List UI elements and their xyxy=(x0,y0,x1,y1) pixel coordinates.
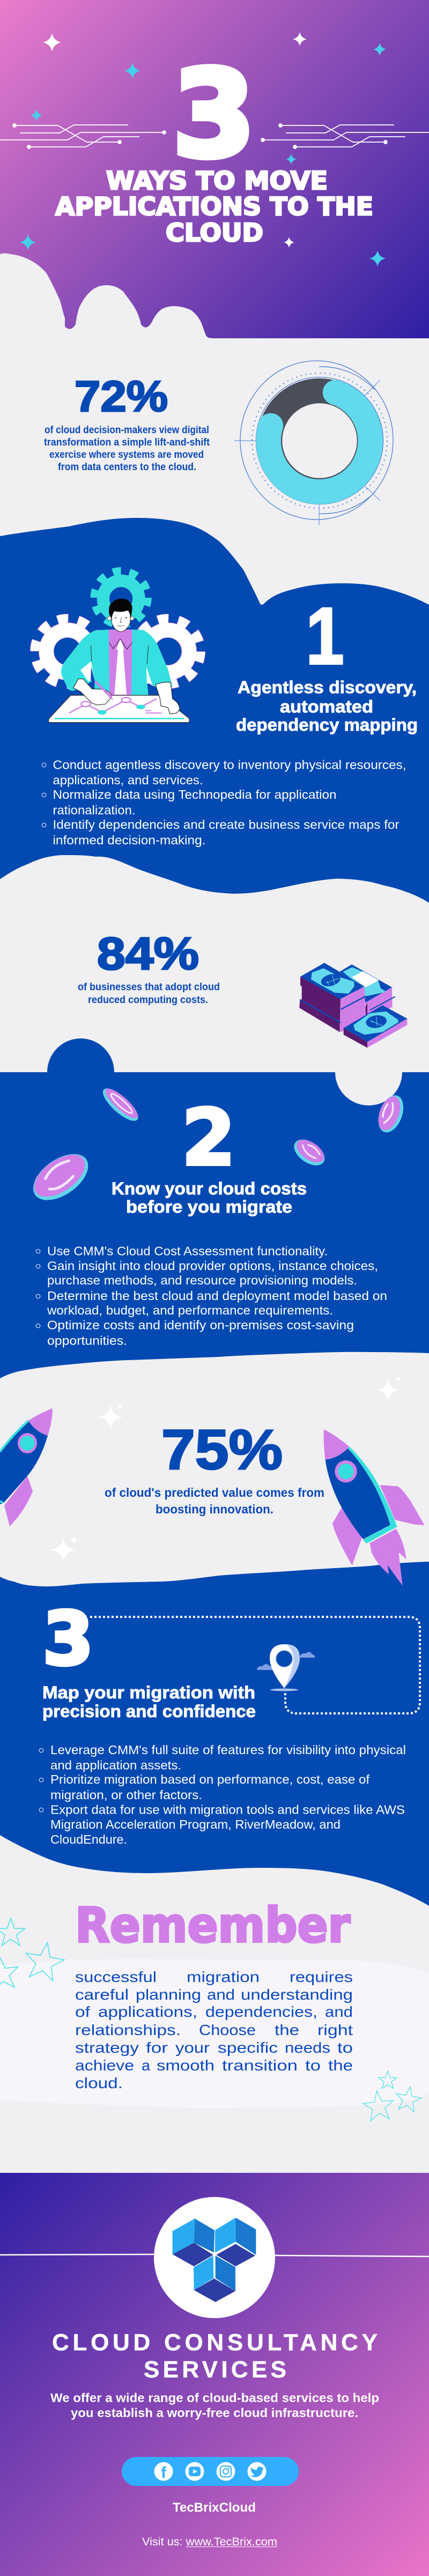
remember body text: applications, xyxy=(98,2003,197,2020)
icon: stars right xyxy=(361,2071,423,2121)
remember body text: the xyxy=(275,2022,299,2038)
title: CLOUD xyxy=(166,218,263,247)
logo circle xyxy=(154,2197,275,2318)
title: APPLICATIONS TO THE xyxy=(55,192,373,221)
step 3 bullets: migration, or other factors. xyxy=(50,1788,202,1802)
sparkle cyan xyxy=(369,250,386,266)
title xyxy=(55,166,373,247)
jacket xyxy=(61,629,173,695)
stat description: of cloud decision-makers view digital xyxy=(45,425,209,436)
step 3 bullets xyxy=(39,1743,406,1846)
remember body text: successful xyxy=(75,1969,157,1985)
remember body text: careful xyxy=(75,1986,129,2003)
title: WAYS TO MOVE xyxy=(106,166,328,195)
stat number: 75% xyxy=(161,1419,283,1481)
panel: stat 84% xyxy=(78,929,407,1048)
remember body text: achieve xyxy=(75,2057,134,2074)
step 3 bullets: Prioritize migration based on performance, cost, ease of xyxy=(50,1772,370,1786)
icon: coin right xyxy=(374,1092,408,1136)
step 1 bullets: Normalize data using Technopedia for application xyxy=(53,788,337,801)
remember body text: of xyxy=(75,2003,90,2020)
left hand with pen xyxy=(73,679,113,705)
stat description xyxy=(78,982,220,1006)
stat description: transformation a simple lift-and-shift xyxy=(44,437,210,448)
icon: twitter xyxy=(248,2462,266,2481)
stat description: boosting innovation. xyxy=(156,1502,273,1516)
panel: footer xyxy=(0,2173,429,2576)
panel: stat 75% band xyxy=(0,1352,429,1586)
circuit lines right xyxy=(261,124,429,149)
remember body text xyxy=(75,1969,353,2091)
remember body text: a xyxy=(142,2057,150,2074)
remember body text: and xyxy=(207,1986,235,2003)
panel: remember background xyxy=(0,1835,429,2173)
icon: stacks of money xyxy=(299,963,407,1048)
step 2 bullets: Gain insight into cloud provider options, instance choices, xyxy=(47,1259,378,1273)
remember body text: dependencies, xyxy=(205,2003,317,2020)
remember body text: cloud. xyxy=(75,2075,123,2091)
donut chart xyxy=(234,361,393,525)
remember body text: the xyxy=(328,2057,353,2074)
step 3 bullets: and application assets. xyxy=(50,1758,181,1772)
step 1 heading: Agentless discovery, xyxy=(238,678,417,697)
remember body text: and xyxy=(325,2003,353,2020)
remember body text: specific xyxy=(218,2039,278,2056)
step 2 bullets: purchase methods, and resource provisioning models. xyxy=(47,1273,357,1287)
sparkle white xyxy=(43,33,61,51)
step 2 heading xyxy=(112,1179,307,1216)
step 1 number: 1 xyxy=(306,591,344,681)
step 1 heading xyxy=(236,678,418,734)
icon: facebook: f xyxy=(161,2464,167,2482)
remember body text: for xyxy=(146,2039,168,2056)
remember heading: Remember xyxy=(75,1897,350,1953)
step 1 bullets: Conduct agentless discovery to inventory physical resources, xyxy=(53,758,406,772)
footer description xyxy=(50,2391,379,2420)
icon: coin small xyxy=(290,1134,329,1171)
sparkle group xyxy=(50,1376,402,1563)
front stack xyxy=(344,1005,407,1048)
sparkle cyan xyxy=(20,234,36,250)
fins and flame xyxy=(332,1485,425,1586)
footer description: you establish a worry-free cloud infrastructure. xyxy=(71,2406,358,2420)
circuit lines left xyxy=(0,124,166,149)
window xyxy=(335,1460,357,1482)
panel: step 1 blue background xyxy=(0,518,429,903)
sparkle cyan xyxy=(373,43,386,56)
collar lines xyxy=(91,639,149,664)
stat description xyxy=(105,1486,324,1516)
step 3 heading: precision and confidence xyxy=(42,1702,256,1721)
step 3 heading: Map your migration with xyxy=(42,1683,255,1702)
step 1 bullets: Identify dependencies and create business service maps for xyxy=(53,818,400,832)
gear white left xyxy=(35,619,100,684)
remember body text: relationships. xyxy=(75,2022,181,2038)
body trim xyxy=(347,1446,397,1543)
step 1 bullets: applications, and services. xyxy=(53,773,203,787)
big number 3: 3 xyxy=(173,46,255,184)
footer description: We offer a wide range of cloud-based services to help xyxy=(50,2391,379,2405)
remember body text: Choose xyxy=(199,2022,256,2038)
notch in blue panel xyxy=(335,1072,402,1105)
panel: hero header xyxy=(0,0,429,343)
stat description: of businesses that adopt cloud xyxy=(78,982,220,993)
panel: step 2 blue background xyxy=(0,1038,429,1909)
step 1 bullets: rationalization. xyxy=(53,803,135,817)
sparkle cyan xyxy=(124,63,140,79)
step 3 number: 3 xyxy=(43,1597,93,1682)
remember body text: planning xyxy=(136,1986,201,2003)
shirt xyxy=(109,629,132,695)
website link: Visit us: www.TecBrix.com xyxy=(142,2536,277,2548)
footer title xyxy=(52,2329,378,2383)
stat description xyxy=(44,425,210,473)
stat description: exercise where systems are moved xyxy=(49,449,204,461)
illustration: man with gears xyxy=(35,571,201,723)
step 2 bullets xyxy=(36,1244,387,1348)
remember body text: transition xyxy=(222,2057,298,2074)
tablet xyxy=(48,695,189,723)
step 3 bullets: CloudEndure. xyxy=(50,1832,127,1846)
gap wedges xyxy=(80,661,152,684)
remember body text: right xyxy=(317,2022,353,2038)
sparkle cyan xyxy=(31,109,42,121)
icon: coin large xyxy=(25,1145,97,1209)
stat number: 72% xyxy=(75,373,168,421)
tablet chart xyxy=(55,697,184,718)
gear teal xyxy=(94,571,148,625)
icon: coin top xyxy=(98,1083,143,1126)
step 1 bullets: informed decision-making. xyxy=(53,833,206,847)
logo cubes xyxy=(173,2218,256,2302)
remember body text: requires xyxy=(290,1969,353,1985)
sparkle white xyxy=(284,237,294,248)
icon: stars left xyxy=(0,1918,66,1991)
icon: instagram xyxy=(217,2462,235,2481)
icon: rocket right xyxy=(324,1429,425,1586)
step 3 bullets: Migration Acceleration Program, RiverMeadow, and xyxy=(50,1817,341,1831)
brand name: TecBrixCloud xyxy=(173,2500,256,2515)
back stack xyxy=(339,964,395,1018)
step 3 bullets: Export data for use with migration tools and services like AWS xyxy=(50,1802,405,1816)
icon: rocket left xyxy=(0,1408,53,1526)
seam line xyxy=(0,2254,429,2256)
sparkle cyan xyxy=(286,154,297,165)
icon: youtube xyxy=(186,2462,204,2481)
step 2 bullets: Optimize costs and identify on-premises cost-saving xyxy=(47,1318,354,1332)
step 2 number: 2 xyxy=(182,1093,235,1183)
remember text panel xyxy=(0,1959,429,2108)
tie xyxy=(114,639,127,695)
stat description: reduced computing costs. xyxy=(88,994,208,1006)
nose xyxy=(324,1429,349,1460)
step 1 heading: dependency mapping xyxy=(236,715,418,734)
remember body text: migration xyxy=(187,1969,260,1985)
step 2 heading: Know your cloud costs xyxy=(112,1179,307,1198)
footer title: CLOUD CONSULTANCY xyxy=(52,2329,378,2356)
step 2 bullets: Use CMM's Cloud Cost Assessment functionality. xyxy=(47,1244,328,1258)
remember body text: smooth xyxy=(157,2057,214,2074)
step 2 bullets: opportunities. xyxy=(47,1334,127,1348)
step 2 heading: before you migrate xyxy=(126,1197,292,1216)
icon: map pin xyxy=(257,1644,315,1691)
remember body text: to xyxy=(305,2057,321,2074)
icon: facebook xyxy=(154,2462,173,2482)
gear white right xyxy=(135,619,201,684)
step 1 heading: automated xyxy=(280,697,373,716)
step 2 bullets: Determine the best cloud and deployment model based on xyxy=(47,1289,387,1303)
remember body text: your xyxy=(175,2039,210,2056)
dotted route xyxy=(90,1617,420,1713)
remember body text: understanding xyxy=(241,1986,353,2003)
main stack xyxy=(299,963,366,1032)
step 3 heading xyxy=(42,1683,256,1721)
panel: stat 72% xyxy=(44,361,393,525)
remember body text: to xyxy=(337,2039,353,2056)
footer title: SERVICES xyxy=(144,2357,286,2383)
head xyxy=(107,599,134,632)
step 1 bullets xyxy=(42,758,406,847)
step 3 bullets: Leverage CMM's full suite of features for visibility into physical xyxy=(50,1743,406,1757)
stat description: from data centers to the cloud. xyxy=(58,462,196,473)
stat number: 84% xyxy=(97,929,199,979)
remember body text: strategy xyxy=(75,2039,139,2056)
cloud drips xyxy=(0,253,212,343)
remember body text: needs xyxy=(285,2039,330,2056)
sparkle white xyxy=(293,32,307,46)
body xyxy=(326,1449,390,1539)
stat description: of cloud's predicted value comes from xyxy=(105,1486,324,1499)
right hand xyxy=(156,682,180,714)
step 2 bullets: workload, budget, and performance requirements. xyxy=(47,1303,333,1317)
social media pill xyxy=(122,2457,299,2486)
